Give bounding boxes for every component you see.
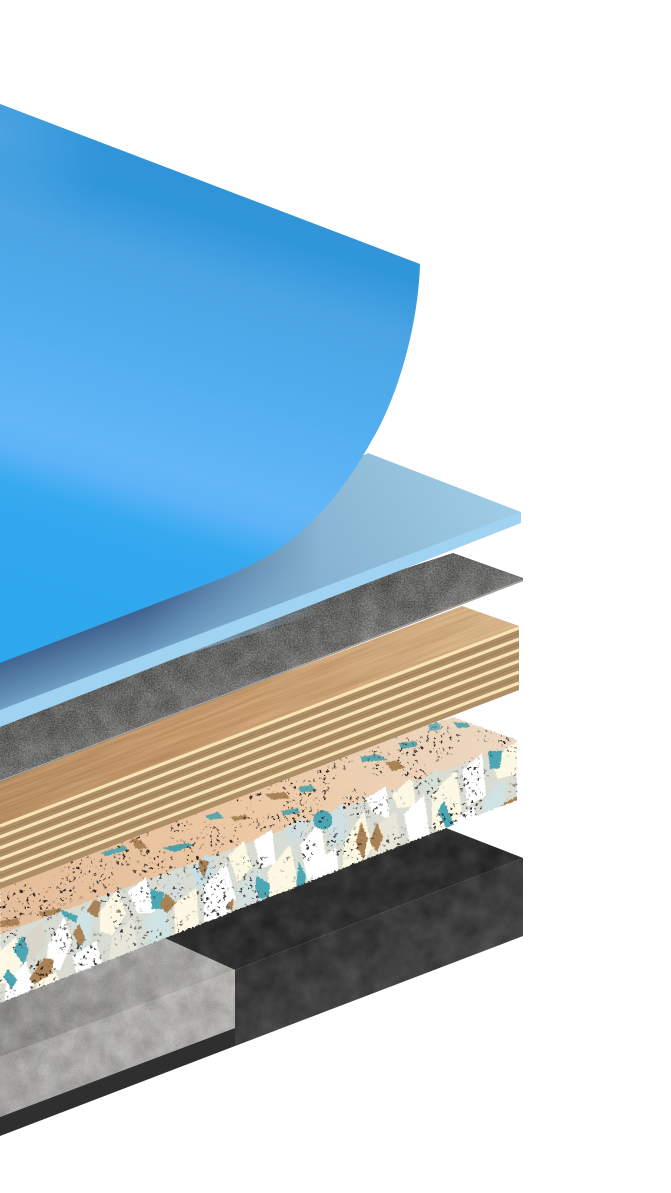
layer: black strip under concrete bbox=[0, 1028, 235, 1136]
board front edge bbox=[0, 512, 521, 727]
layer: concrete slab bbox=[0, 930, 240, 1120]
layer: black rubber block bbox=[150, 825, 530, 1050]
layer: plywood board bbox=[0, 606, 520, 889]
layer: light blue board bbox=[0, 453, 521, 727]
foam top surface bbox=[0, 710, 520, 940]
layer: grey felt bbox=[0, 545, 530, 785]
plywood edge with laminations bbox=[0, 628, 519, 889]
board top surface bbox=[0, 453, 521, 712]
layer: rebonded foam underlay bbox=[0, 710, 520, 1009]
plywood top surface bbox=[0, 606, 519, 824]
illustration: layered floor build-up bbox=[0, 104, 524, 1136]
layer: curled blue sheet bbox=[0, 104, 420, 663]
foam front face bbox=[0, 735, 520, 1009]
